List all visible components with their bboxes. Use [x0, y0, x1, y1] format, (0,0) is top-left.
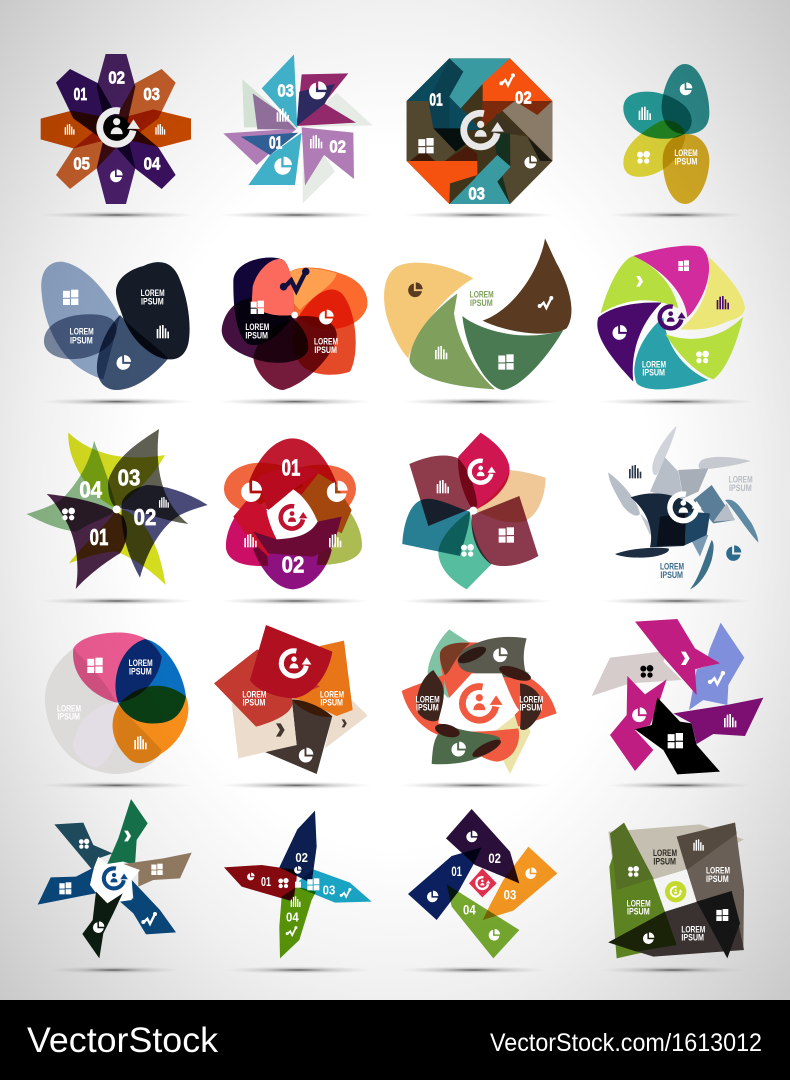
numbers: 03	[118, 465, 140, 491]
numbers: 03	[504, 886, 517, 902]
numbers	[282, 454, 304, 578]
label: IPSUM	[675, 157, 698, 167]
white labels: LOREM	[627, 898, 651, 908]
infographic 7: four curved leaves	[384, 238, 571, 405]
icons	[241, 481, 348, 547]
icons	[65, 124, 165, 182]
numbers: 02	[488, 850, 501, 866]
labels: LOREM	[70, 327, 94, 337]
arrow blades	[592, 619, 763, 774]
labels: IPSUM	[729, 483, 752, 493]
pie icon	[299, 748, 313, 763]
infographic 18: four blade pinwheel	[224, 811, 372, 974]
blades	[27, 429, 208, 589]
numbers: 02	[295, 850, 308, 865]
labels: LOREM	[129, 658, 153, 668]
shadow	[600, 966, 747, 974]
numbers: 04	[144, 153, 161, 173]
shadow	[398, 782, 552, 789]
shapes	[608, 823, 744, 958]
labels	[416, 694, 543, 713]
label: LOREM	[470, 290, 494, 300]
numbers: 01	[269, 133, 283, 153]
numbers	[261, 850, 335, 925]
coral overlap	[252, 259, 294, 316]
labels: LOREM	[314, 336, 338, 346]
icons	[437, 480, 514, 557]
white icons	[435, 296, 553, 370]
infographic 15: interlaced ring	[398, 629, 557, 789]
icons	[63, 290, 169, 370]
labels	[57, 658, 153, 722]
label: IPSUM	[642, 368, 665, 378]
infographic 19: four arrow tags	[400, 809, 557, 974]
shadow	[220, 211, 373, 219]
lower blade	[82, 892, 123, 958]
infographic 12: blue-gray propeller	[600, 426, 758, 605]
shapes	[214, 625, 368, 774]
petals	[224, 438, 362, 589]
numbers: 03	[323, 882, 335, 897]
leaves	[384, 238, 571, 390]
icons	[59, 831, 163, 933]
gray base	[45, 648, 162, 774]
white center	[267, 489, 318, 539]
numbers: 02	[329, 137, 346, 157]
shadow	[598, 398, 755, 405]
white labels: IPSUM	[681, 933, 704, 943]
labels: LOREM	[519, 694, 543, 704]
shadow	[402, 398, 558, 405]
dark bands	[417, 637, 542, 764]
labels: LOREM	[57, 703, 81, 713]
icons	[612, 260, 709, 363]
numbers: 03	[277, 81, 294, 101]
numbers: 02	[515, 88, 532, 108]
center icon	[670, 494, 702, 521]
petals	[41, 54, 191, 204]
center icon	[281, 651, 311, 676]
label: IPSUM	[470, 298, 493, 308]
blades	[224, 811, 372, 958]
labels: IPSUM	[243, 698, 266, 708]
icons	[628, 839, 728, 944]
labels: IPSUM	[520, 703, 543, 713]
shadow	[608, 211, 745, 219]
arrow blades	[38, 799, 192, 934]
center dot	[469, 507, 477, 515]
numbers: 03	[143, 84, 160, 104]
shadow	[40, 782, 193, 789]
white center	[90, 857, 140, 903]
labels: LOREM	[245, 322, 269, 332]
labels	[70, 288, 165, 345]
bars icon	[717, 296, 729, 309]
shadow	[607, 782, 753, 789]
shadow	[40, 398, 193, 405]
infographic 5: blue blobs	[40, 262, 193, 405]
labels: LOREM	[141, 288, 165, 298]
dark label: IPSUM	[653, 856, 676, 866]
label: LOREM	[674, 148, 698, 158]
black dots icon	[640, 665, 653, 678]
infographic 1: six-petal hexagon flower	[38, 54, 195, 219]
tags	[408, 809, 557, 958]
center icon	[660, 306, 686, 328]
infographic 4: four rounded petals	[608, 64, 745, 219]
numbers: 02	[134, 504, 156, 530]
white center	[447, 673, 519, 727]
shadow	[400, 966, 547, 974]
numbers: 01	[74, 84, 87, 104]
white labels: IPSUM	[706, 874, 729, 884]
shadow	[220, 782, 373, 789]
white labels: LOREM	[681, 924, 705, 934]
light orange area	[283, 268, 337, 310]
numbers: 04	[286, 910, 299, 925]
infographic 10: atom flower	[220, 438, 370, 605]
lavender leaf	[73, 703, 119, 767]
icons	[247, 866, 351, 935]
white icons	[632, 652, 736, 748]
label: LOREM	[642, 359, 666, 369]
labels: LOREM	[416, 694, 440, 704]
infographic 11: five leaf flower	[400, 433, 553, 605]
labels: IPSUM	[314, 345, 337, 355]
dark label	[653, 848, 677, 866]
pale triangles	[242, 79, 373, 203]
footer bar	[0, 1000, 790, 1080]
label	[674, 148, 698, 167]
labels	[660, 475, 753, 580]
numbers: 03	[468, 183, 485, 203]
numbers: 01	[261, 874, 271, 889]
shadow	[600, 597, 753, 605]
numbers: 05	[73, 153, 90, 173]
blades	[223, 54, 356, 186]
shadow	[400, 597, 553, 605]
icons	[62, 497, 169, 520]
shadow	[47, 966, 180, 974]
shadow	[220, 597, 370, 605]
icons	[408, 282, 423, 297]
blobs	[41, 262, 190, 390]
chevrons	[276, 719, 347, 737]
labels: IPSUM	[660, 570, 683, 580]
labels: IPSUM	[245, 331, 268, 341]
petals	[623, 64, 709, 204]
shadow	[38, 597, 195, 605]
numbers: 01	[282, 454, 300, 480]
numbers: 04	[463, 902, 476, 918]
white labels: IPSUM	[627, 907, 650, 917]
center icon	[464, 113, 504, 147]
white labels	[627, 866, 730, 943]
infographic 6: warm blobs	[218, 257, 372, 405]
label	[470, 290, 494, 308]
shadow	[38, 211, 195, 219]
center diamond	[469, 868, 497, 897]
infographic 20: olive and brown square	[600, 823, 747, 974]
label	[642, 359, 666, 378]
labels: LOREM	[660, 562, 684, 572]
numbers	[79, 465, 156, 550]
numbers	[451, 850, 517, 918]
dark label: LOREM	[653, 848, 677, 858]
numbers: 04	[79, 477, 102, 503]
numbers: 02	[108, 67, 125, 87]
labels: LOREM	[242, 689, 266, 699]
labels: IPSUM	[320, 698, 343, 708]
center icon	[470, 461, 496, 483]
footer url: VectorStock.com/1613012	[490, 1029, 762, 1057]
labels: IPSUM	[416, 703, 439, 713]
zigzag icon	[280, 268, 310, 291]
numbers	[429, 88, 532, 203]
thin blades	[608, 426, 758, 589]
infographic 13: round venn	[40, 633, 193, 789]
infographic 14: red kite shapes	[214, 625, 373, 789]
infographic 17: six arrow star	[38, 799, 192, 974]
icons	[418, 73, 537, 169]
icons	[427, 831, 537, 941]
colored petals	[73, 633, 188, 763]
pale shapes	[428, 629, 531, 774]
labels: IPSUM	[57, 712, 80, 722]
infographic 16: angular arrows pinwheel	[592, 619, 763, 789]
numbers	[269, 81, 346, 157]
numbers: 01	[429, 89, 443, 109]
infographic 2: triangle pinwheel	[220, 54, 373, 219]
shadow	[403, 211, 557, 219]
center icon	[462, 687, 503, 720]
labels: LOREM	[729, 475, 753, 485]
center icon	[100, 111, 140, 144]
shadow	[225, 966, 372, 974]
infographic 3: octagon	[403, 58, 557, 219]
icons	[451, 647, 508, 757]
inner ring bands	[233, 467, 352, 557]
icons	[274, 81, 327, 175]
labels: LOREM	[320, 689, 344, 699]
icons	[251, 301, 334, 325]
center icon	[665, 881, 686, 902]
numbers: 02	[282, 552, 304, 578]
footer brand: VectorStock	[27, 1021, 219, 1060]
petals	[402, 433, 546, 589]
bars icon	[629, 465, 641, 478]
body	[631, 457, 735, 557]
octagon pieces	[407, 58, 552, 204]
center dot	[295, 882, 301, 888]
labels	[242, 689, 344, 708]
numbers	[73, 67, 161, 173]
labels: IPSUM	[141, 297, 164, 307]
infographic 8: six-blade swirl pentagon	[597, 246, 755, 405]
red blades	[402, 642, 557, 762]
center icon	[281, 506, 307, 529]
labels	[245, 322, 338, 355]
infographic 9: star blades	[27, 429, 208, 605]
shadow	[218, 398, 372, 405]
labels: IPSUM	[129, 666, 152, 676]
center icon	[476, 877, 490, 889]
blades	[597, 246, 745, 389]
blobs	[222, 257, 367, 390]
pie icon	[726, 545, 741, 561]
center dot	[291, 312, 298, 318]
white center	[653, 869, 697, 912]
icons	[87, 658, 147, 749]
numbers: 01	[90, 524, 108, 550]
center icon	[104, 868, 128, 888]
labels: IPSUM	[70, 335, 93, 345]
icons	[637, 82, 692, 164]
white labels: LOREM	[706, 866, 730, 876]
numbers: 01	[451, 863, 462, 879]
